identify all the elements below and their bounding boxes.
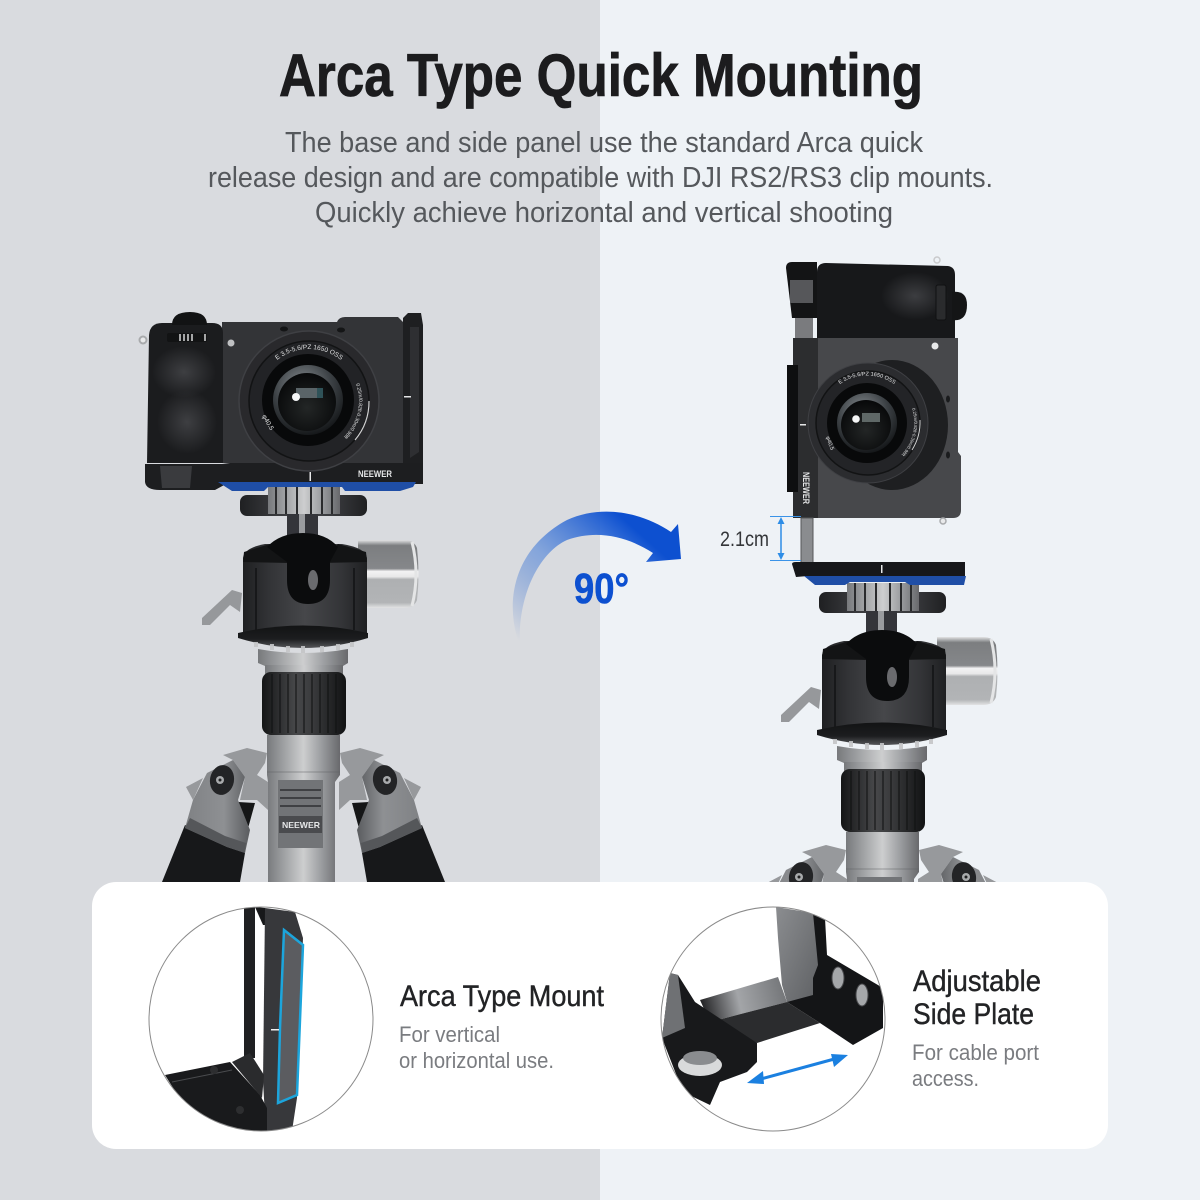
bracket connector	[795, 318, 813, 340]
tripod and ball head, right	[769, 583, 998, 882]
camera body	[818, 338, 961, 518]
lens: φ40.5	[824, 436, 835, 451]
camera grip	[147, 323, 223, 463]
grip on top	[817, 263, 955, 338]
blue arca strip	[218, 482, 416, 491]
text: arca type mount: Arca Type Mount	[400, 980, 605, 1013]
strap lug bottom	[940, 518, 946, 524]
camera body	[222, 317, 403, 463]
icon: strap lug	[140, 336, 146, 344]
text: adjustable side plate: access.	[912, 1066, 979, 1091]
base plate end	[786, 262, 817, 318]
measurement label: 2.1cm	[720, 528, 769, 551]
grip plate highlight	[160, 466, 192, 488]
description text block: release design and are compatible with DJI RS2/RS3 clip mounts.	[208, 162, 993, 194]
power indicator	[932, 342, 938, 350]
L bracket vertical plate	[403, 313, 423, 478]
command dial	[952, 292, 967, 320]
NEEWER vertical logo: NEEWER	[801, 472, 811, 504]
lens	[808, 360, 948, 490]
description text block: The base and side panel use the standard Arca quick	[285, 127, 923, 159]
lens: 0.25m/0.82ft-0.30m/0.98ft	[902, 408, 918, 456]
camera in horizontal position with L bracket	[138, 312, 423, 491]
lens: E 3.5-5.6/PZ 1650 OSS	[838, 372, 896, 384]
text: adjustable side plate: For cable port	[912, 1040, 1039, 1065]
body screw holes	[280, 326, 288, 332]
L bracket base plate	[145, 463, 423, 490]
leather highlights	[152, 346, 216, 398]
bottom white card	[92, 882, 1108, 1149]
background: right pale half	[600, 0, 1200, 1200]
lens: E 3.5-5.6/PZ 1650 OSS	[274, 344, 343, 360]
icon: double blue arrow	[747, 1054, 848, 1084]
scroll wheel	[936, 285, 946, 320]
text: arca type mount: For vertical	[399, 1022, 500, 1047]
body holes	[946, 396, 950, 402]
index tick	[310, 472, 311, 481]
detail circle: arca type mount	[149, 907, 373, 1131]
text: adjustable side plate: Adjustable	[913, 965, 1041, 998]
text: arca type mount	[399, 980, 605, 1073]
indicator dot	[228, 340, 234, 346]
description text block: Quickly achieve horizontal and vertical shooting	[315, 197, 893, 229]
bracket stem	[801, 518, 813, 564]
detail circle: adjustable side plate	[661, 907, 885, 1131]
title: Arca Type Quick Mounting	[279, 42, 923, 109]
bracket foot plate	[792, 562, 965, 577]
description text block	[208, 127, 993, 229]
tripod and ball head, left: NEEWER	[282, 820, 320, 830]
tripod and ball head, left	[162, 486, 445, 882]
lens: 0.25m/0.82ft-0.30m/0.98ft	[344, 384, 363, 439]
scroll wheel	[167, 333, 207, 342]
lens: φ40.5	[260, 414, 275, 432]
camera top dial	[172, 312, 207, 325]
text: adjustable side plate	[912, 965, 1041, 1091]
measurement 2.1cm	[720, 516, 801, 560]
strap lug top	[934, 257, 940, 263]
text: adjustable side plate: Side Plate	[913, 998, 1034, 1031]
text: arca type mount: or horizontal use.	[399, 1048, 554, 1073]
background: left grey half	[0, 0, 600, 1200]
leather highlight	[881, 272, 949, 320]
lens	[238, 330, 380, 472]
rotation arrow 90 degrees	[513, 512, 681, 647]
NEEWER logo: NEEWER	[358, 469, 392, 480]
rotation label: 90°	[574, 565, 629, 613]
bracket side	[793, 338, 818, 518]
camera in vertical position with bracket gap	[786, 256, 967, 585]
